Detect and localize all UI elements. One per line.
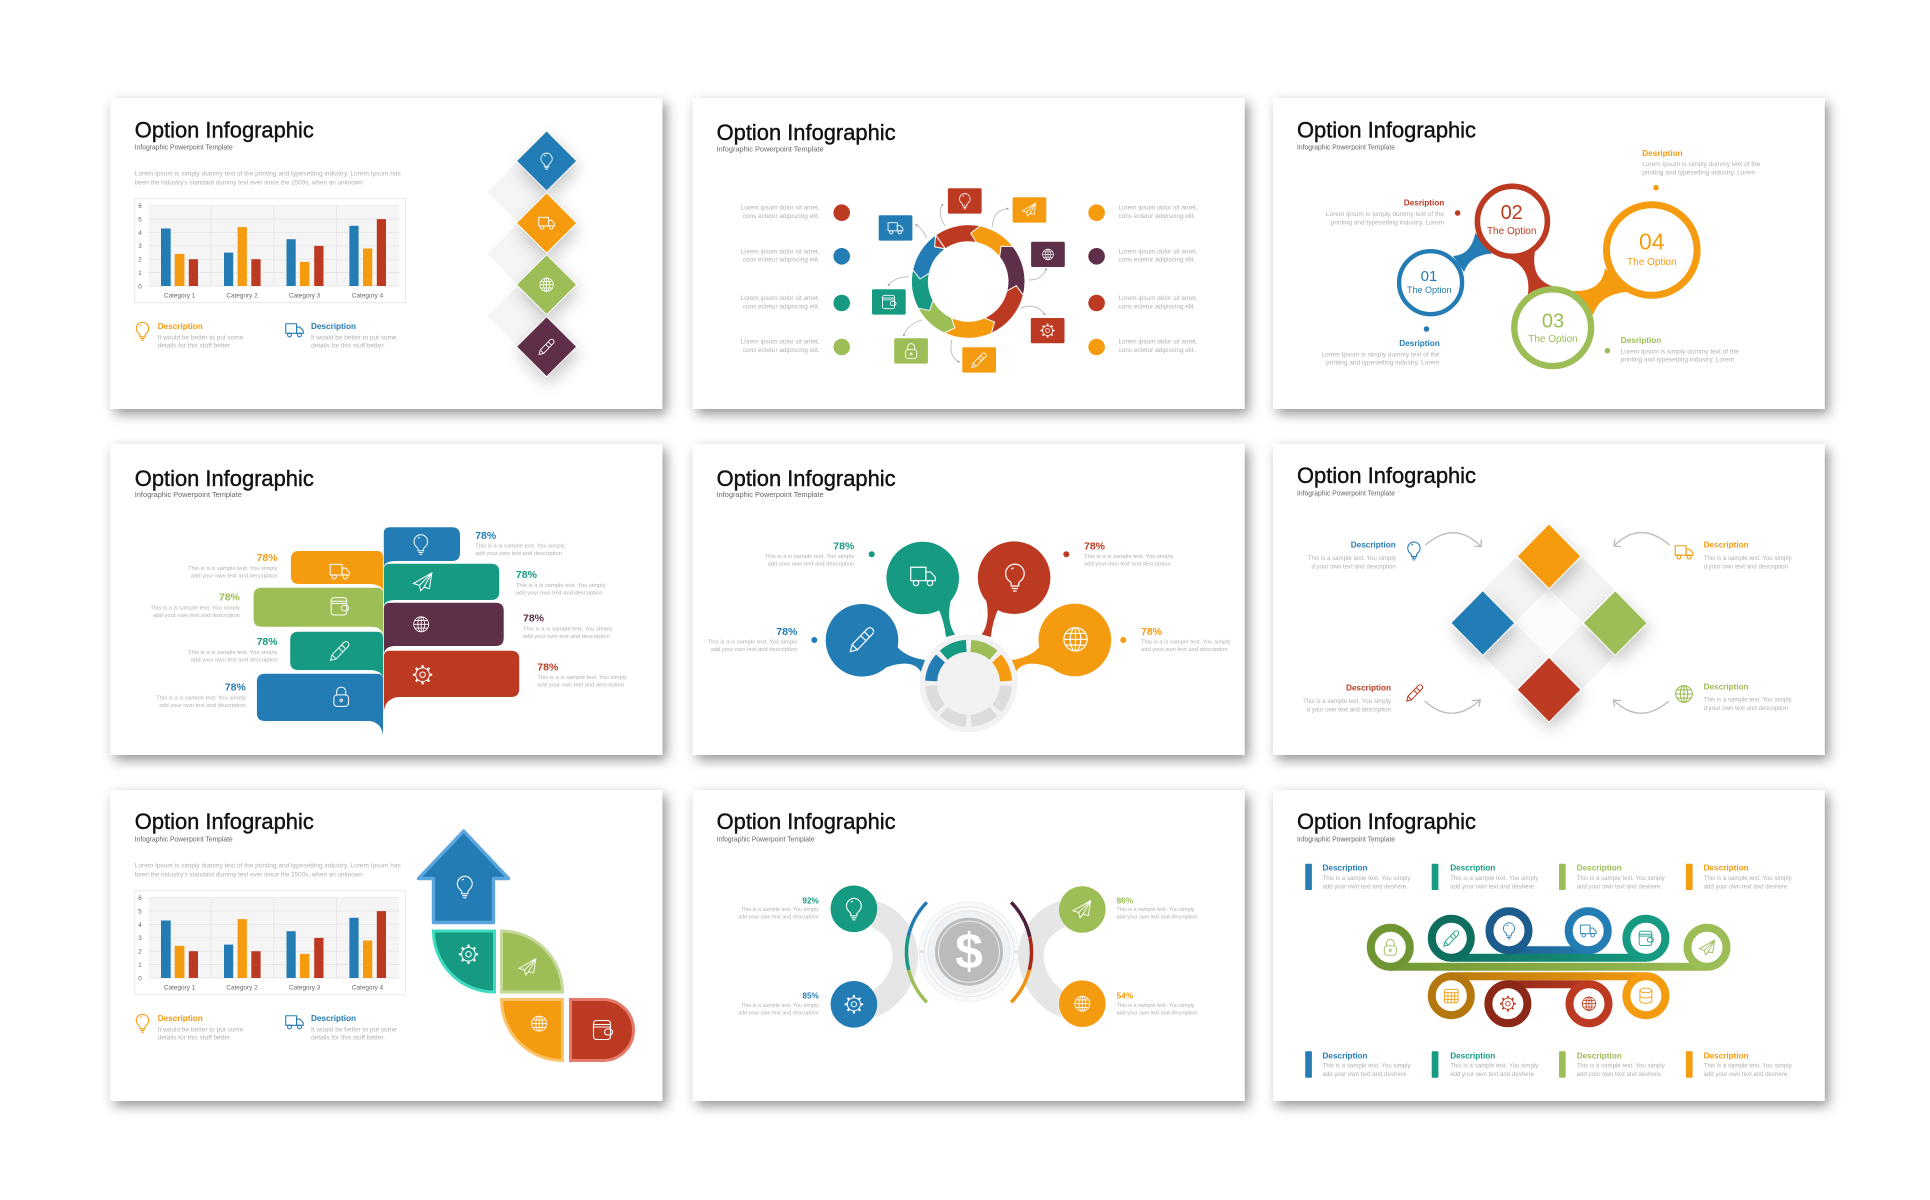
captions xyxy=(708,540,1231,653)
bar chart: 5 xyxy=(138,908,142,915)
captions: d your own text and description xyxy=(1307,706,1391,713)
panel 9: ring timeline xyxy=(1297,809,1793,1078)
circle 02 xyxy=(1477,186,1547,256)
right text blocks: cons ectetur adipiscing elit. xyxy=(1118,303,1195,310)
intro text: been the industry's standard dummy text ever since the 1500s, when an unknown xyxy=(135,180,363,187)
icon circles xyxy=(831,886,1106,1028)
subtitle: Infographic Powerpoint Template xyxy=(717,490,824,499)
right captions: This is a is sample text. You simply xyxy=(537,675,627,681)
right captions: add your own text and description xyxy=(537,682,624,688)
bottom descriptions: This is a sample text. You simply xyxy=(1322,1063,1412,1070)
circle 02: The Option xyxy=(1487,226,1536,237)
dial xyxy=(916,630,1022,736)
right coloured arc xyxy=(1011,902,1032,1002)
captions: add your own text and description xyxy=(768,561,854,567)
title: Option Infographic xyxy=(717,809,896,834)
right text blocks: cons ectetur adipiscing elit. xyxy=(1118,213,1195,220)
left captions xyxy=(150,552,278,709)
bottom descriptions: This is a sample text. You simply xyxy=(1577,1063,1666,1070)
right tabs xyxy=(384,527,519,712)
left captions: This is a is sample text. You simply xyxy=(188,566,278,572)
left text blocks: Lorem ipsum dolor sit amet, xyxy=(741,248,820,255)
captions: Description xyxy=(1704,540,1749,549)
subtitle: Infographic Powerpoint Template xyxy=(135,490,242,499)
description: orange: Lorem Ipsum is simply dummy text of the xyxy=(1642,161,1761,168)
title: Option Infographic xyxy=(1297,118,1476,143)
bar chart: Category 1 xyxy=(164,292,196,299)
right captions: 78% xyxy=(516,569,538,581)
bar chart: Category 1 xyxy=(164,984,196,991)
bottom descriptions: add your own text and deshere. xyxy=(1577,1071,1662,1078)
bar chart: 0 xyxy=(138,975,142,982)
bottom descriptions: Description xyxy=(1704,1051,1749,1060)
left captions: add your own text and description xyxy=(191,657,278,663)
description: green: Lorem Ipsum is simply dummy text of the xyxy=(1621,348,1739,355)
right captions: This is a is sample text. You simply xyxy=(475,544,565,550)
captions: This is a is sample text. You simply xyxy=(1141,640,1231,646)
captions: 92% xyxy=(802,896,820,905)
circle 03 xyxy=(1514,289,1591,366)
left text blocks: Lorem ipsum dolor sit amet, xyxy=(741,339,820,346)
right text blocks: cons ectetur adipiscing elit. xyxy=(1118,347,1195,354)
description: blue: It would be better to put some xyxy=(311,1027,397,1034)
captions: add your own text and description xyxy=(1117,1010,1197,1016)
left captions: This is a is sample text. You simply xyxy=(188,650,278,656)
captions: add your own text and description xyxy=(738,914,819,920)
description: blue: It would be better to put some xyxy=(311,335,397,342)
bar chart: Category 4 xyxy=(352,292,384,299)
captions: add your own text and description xyxy=(711,647,797,653)
circle 01: 01 xyxy=(1421,268,1437,285)
left captions: This is a is sample text. You simply xyxy=(150,606,240,612)
left captions: 78% xyxy=(257,552,278,564)
grey connectors xyxy=(871,901,1065,1017)
bottom descriptions: Description xyxy=(1450,1051,1495,1060)
intro text: Lorem Ipsum is simply dummy text of the printing and typesetting industry. Lorem Ipsum has xyxy=(135,170,401,177)
bar chart: Category 4 xyxy=(352,984,384,991)
panel 1: bar chart and stacked diamonds xyxy=(135,118,577,377)
captions: d your own text and description xyxy=(1704,563,1788,570)
captions: This is a sample text. You simply xyxy=(1303,698,1392,705)
left text blocks: cons ectetur adipiscing elit. xyxy=(743,347,820,354)
right text blocks: Lorem ipsum dolor sit amet, xyxy=(1118,295,1198,302)
circle 03: 03 xyxy=(1542,311,1564,333)
top descriptions: add your own text and deshere. xyxy=(1450,883,1536,890)
description: orange xyxy=(1642,149,1761,190)
right captions: This is a is sample text. You simply xyxy=(523,626,613,632)
description: orange: details for this stuff better. xyxy=(158,1035,232,1042)
up arrow xyxy=(418,831,508,922)
captions: Description xyxy=(1351,540,1396,549)
right captions: 78% xyxy=(475,530,497,542)
stacked diamonds xyxy=(487,131,577,377)
top descriptions: Description xyxy=(1577,864,1622,873)
top descriptions: This is a sample text. You simply xyxy=(1450,875,1539,882)
slide panel backgrounds xyxy=(110,98,1825,1101)
dollar coin: $ xyxy=(955,924,983,980)
captions xyxy=(738,896,1197,1016)
circle 01 xyxy=(1399,251,1462,314)
description: blue: Desription xyxy=(1399,339,1440,348)
right captions xyxy=(475,530,627,688)
subtitle: Infographic Powerpoint Template xyxy=(135,143,233,152)
green quarter xyxy=(502,931,562,992)
bottom descriptions: Description xyxy=(1577,1051,1622,1060)
panel 5: balloons on a dial xyxy=(708,466,1231,736)
description: green xyxy=(1605,336,1739,364)
captions: This is a sample text. You simply xyxy=(1117,1003,1195,1009)
top descriptions: This is a sample text. You simply xyxy=(1577,875,1666,882)
circle 04: 04 xyxy=(1639,228,1665,254)
bottom descriptions: add your own text and deshere. xyxy=(1450,1071,1536,1078)
bar chart: Category 3 xyxy=(289,984,321,991)
captions: This is a sample text. You simply xyxy=(1704,555,1793,562)
description: blue xyxy=(1321,326,1440,367)
description: blue xyxy=(311,322,397,350)
bar chart: 4 xyxy=(138,230,142,237)
subtitle: Infographic Powerpoint Template xyxy=(1297,143,1395,152)
captions: This is a sample text. You simply xyxy=(1704,697,1793,704)
left content block xyxy=(135,862,406,1042)
captions: This is a is sample text. You simply xyxy=(708,640,797,646)
circle 03: The Option xyxy=(1528,334,1578,345)
left tabs xyxy=(254,551,383,736)
bar chart: 1 xyxy=(138,270,142,277)
description: orange xyxy=(158,322,244,350)
captions: This is a sample text. You simply xyxy=(741,1003,819,1009)
bottom descriptions: This is a sample text. You simply xyxy=(1450,1063,1539,1070)
top descriptions: Description xyxy=(1704,864,1749,873)
description: orange: It would be better to put some xyxy=(158,1027,244,1034)
description: blue xyxy=(311,1014,397,1042)
right text blocks: Lorem ipsum dolor sit amet, xyxy=(1118,248,1198,255)
bottom descriptions: This is a sample text. You simply xyxy=(1704,1063,1793,1070)
captions: 78% xyxy=(833,540,855,552)
captions xyxy=(1303,540,1793,713)
panel 6: four diamonds xyxy=(1297,463,1793,722)
intro text: been the industry's standard dummy text ever since the 1500s, when an unknown xyxy=(135,872,363,879)
intro text xyxy=(135,170,401,187)
bar chart: 2 xyxy=(138,948,142,956)
captions: 78% xyxy=(1084,540,1106,552)
icons xyxy=(1407,542,1693,702)
description: orange: printing and typesetting industry. Lorem xyxy=(1642,169,1756,176)
description: blue: printing and typesetting industry. Lorem xyxy=(1326,360,1440,367)
captions: d your own text and description xyxy=(1311,563,1396,570)
subtitle: Infographic Powerpoint Template xyxy=(1297,835,1395,844)
circle 04: The Option xyxy=(1627,257,1677,268)
description: blue: Description xyxy=(311,322,356,331)
panel 3: linked option circles xyxy=(1297,118,1761,367)
bottom descriptions: add your own text and deshere. xyxy=(1704,1071,1789,1078)
circle 04 xyxy=(1606,205,1697,295)
orange quarter xyxy=(502,1000,562,1060)
left captions: 78% xyxy=(219,592,241,604)
left text blocks: cons ectetur adipiscing elit. xyxy=(743,257,820,264)
bottom descriptions xyxy=(1305,1051,1793,1078)
top descriptions: Description xyxy=(1450,864,1495,873)
teal quarter xyxy=(433,931,494,992)
top descriptions: add your own text and deshere. xyxy=(1322,883,1408,890)
balloons xyxy=(826,541,1111,677)
bar chart: 6 xyxy=(138,895,142,902)
description: blue: details for this stuff better. xyxy=(311,1035,385,1042)
description: orange: Description xyxy=(158,1014,203,1023)
title: Option Infographic xyxy=(1297,809,1476,834)
description: orange: Description xyxy=(158,322,203,331)
panel 7: bar chart and arrow path xyxy=(135,809,633,1060)
connectors xyxy=(1453,233,1627,315)
top descriptions xyxy=(1305,864,1793,890)
bar chart: 4 xyxy=(138,922,142,929)
ring diagram xyxy=(1371,911,1726,1023)
red half round xyxy=(570,1000,633,1060)
panel 2: circular arrows xyxy=(717,120,1198,373)
description: red xyxy=(1326,199,1460,226)
captions: add your own text and description xyxy=(1141,647,1228,653)
connector arrows xyxy=(888,204,1047,363)
title: Option Infographic xyxy=(135,809,314,834)
subtitle: Infographic Powerpoint Template xyxy=(135,835,233,844)
right text blocks: Lorem ipsum dolor sit amet, xyxy=(1118,205,1198,212)
captions: This is a sample text. You simply xyxy=(1117,907,1195,913)
dollar coin xyxy=(919,902,1019,1001)
captions: add your own text and description xyxy=(1084,561,1171,567)
top descriptions: add your own text and deshere. xyxy=(1704,883,1789,890)
subtitle: Infographic Powerpoint Template xyxy=(717,835,815,844)
bar chart: 2 xyxy=(138,256,142,264)
left captions: This is a is sample text. You simply xyxy=(156,696,246,702)
captions: 54% xyxy=(1117,992,1134,1001)
diamond lattice xyxy=(1451,524,1647,722)
captions: This is a is sample text. You simply xyxy=(1084,554,1174,560)
description: orange: Desription xyxy=(1642,149,1683,158)
bar chart: Category 3 xyxy=(289,292,321,299)
description: green: printing and typesetting industry. Lorem xyxy=(1621,357,1734,364)
right text blocks: cons ectetur adipiscing elit. xyxy=(1118,257,1195,264)
left text blocks: Lorem ipsum dolor sit amet, xyxy=(741,295,820,302)
left coloured arc xyxy=(906,902,927,1002)
icon: bulb xyxy=(136,1014,149,1032)
left captions: add your own text and description xyxy=(191,573,278,579)
right captions: This is a is sample text. You simply xyxy=(516,583,606,589)
captions: 86% xyxy=(1117,896,1134,905)
bar chart: 6 xyxy=(138,203,142,210)
captions: Description xyxy=(1346,684,1391,693)
captions: 85% xyxy=(802,992,820,1001)
icon: truck xyxy=(286,324,303,337)
description: blue: details for this stuff better. xyxy=(311,343,385,350)
intro text xyxy=(135,862,401,879)
top descriptions: This is a sample text. You simply xyxy=(1322,875,1412,882)
bottom descriptions: add your own text and deshere. xyxy=(1322,1071,1408,1078)
title: Option Infographic xyxy=(135,118,314,143)
description: blue: Description xyxy=(311,1014,356,1023)
title: Option Infographic xyxy=(717,466,896,491)
left captions: add your own text and description xyxy=(159,703,246,709)
right captions: add your own text and description xyxy=(516,590,603,596)
subtitle: Infographic Powerpoint Template xyxy=(717,144,824,153)
right dots xyxy=(1088,204,1105,355)
description: red: printing and typesetting industry. Lorem xyxy=(1331,219,1444,226)
captions: This is a sample text. You simply xyxy=(1308,555,1397,562)
panel 4: split tabs xyxy=(135,466,627,736)
bottom descriptions: Description xyxy=(1322,1051,1368,1060)
ring icons xyxy=(1384,923,1714,1012)
captions: This is a sample text. You simply xyxy=(741,907,819,913)
icon: truck xyxy=(286,1016,303,1029)
panel 8: dollar coin hub xyxy=(717,809,1197,1028)
captions: d your own text and description xyxy=(1704,705,1788,712)
bar chart: Category 2 xyxy=(226,984,258,991)
balloon icons xyxy=(850,564,1087,652)
intro text: Lorem Ipsum is simply dummy text of the printing and typesetting industry. Lorem Ipsum has xyxy=(135,862,401,869)
right text blocks xyxy=(1118,205,1198,354)
captions: 78% xyxy=(1141,626,1163,638)
curved arrows xyxy=(1425,533,1670,713)
captions: Description xyxy=(1704,682,1749,691)
bar chart: 3 xyxy=(138,935,142,942)
right text blocks: Lorem ipsum dolor sit amet, xyxy=(1118,339,1198,346)
icon boxes xyxy=(872,188,1065,373)
description: red: Desription xyxy=(1404,199,1444,208)
left captions: 78% xyxy=(257,636,278,648)
title: Option Infographic xyxy=(135,466,314,491)
bar chart: 0 xyxy=(138,283,142,290)
captions: This is a is sample text. You simply xyxy=(765,554,854,560)
right captions: add your own text and description xyxy=(475,551,562,557)
bar chart: 5 xyxy=(138,216,142,223)
left text blocks xyxy=(741,205,820,354)
description: blue: Lorem Ipsum is simply dummy text of the xyxy=(1321,351,1440,358)
left captions: add your own text and description xyxy=(153,613,240,619)
top descriptions: add your own text and deshere. xyxy=(1577,883,1662,890)
title: Option Infographic xyxy=(717,120,896,145)
left captions: 78% xyxy=(225,682,246,694)
top descriptions: Description xyxy=(1322,864,1368,873)
left text blocks: cons ectetur adipiscing elit. xyxy=(743,213,820,220)
bar chart xyxy=(135,891,406,995)
shape icons xyxy=(457,876,612,1040)
captions: 78% xyxy=(776,626,798,638)
description: orange: It would be better to put some xyxy=(158,335,244,342)
bar chart xyxy=(135,199,406,303)
left text blocks: Lorem ipsum dolor sit amet, xyxy=(741,205,820,212)
top descriptions: This is a sample text. You simply xyxy=(1704,875,1793,882)
bar chart: 1 xyxy=(138,962,142,969)
right captions: 78% xyxy=(537,661,559,673)
left dots xyxy=(833,204,850,355)
description: orange: details for this stuff better. xyxy=(158,343,232,350)
description: green: Desription xyxy=(1621,336,1661,345)
circle 01: The Option xyxy=(1407,285,1452,295)
bar chart: 3 xyxy=(138,243,142,250)
description: orange xyxy=(158,1014,244,1042)
tab icons xyxy=(330,535,432,706)
right captions: 78% xyxy=(523,613,545,625)
bar chart: Category 2 xyxy=(226,292,258,299)
right captions: add your own text and description xyxy=(523,634,610,640)
captions: add your own text and description xyxy=(738,1010,819,1016)
icon: bulb xyxy=(136,322,149,340)
subtitle: Infographic Powerpoint Template xyxy=(1297,489,1395,498)
captions: add your own text and description xyxy=(1117,914,1197,920)
description: red: Lorem Ipsum is simply dummy text of the xyxy=(1326,211,1444,218)
left text blocks: cons ectetur adipiscing elit. xyxy=(743,303,820,310)
arrow ring xyxy=(911,225,1025,338)
title: Option Infographic xyxy=(1297,463,1476,488)
circle 02: 02 xyxy=(1501,202,1523,224)
